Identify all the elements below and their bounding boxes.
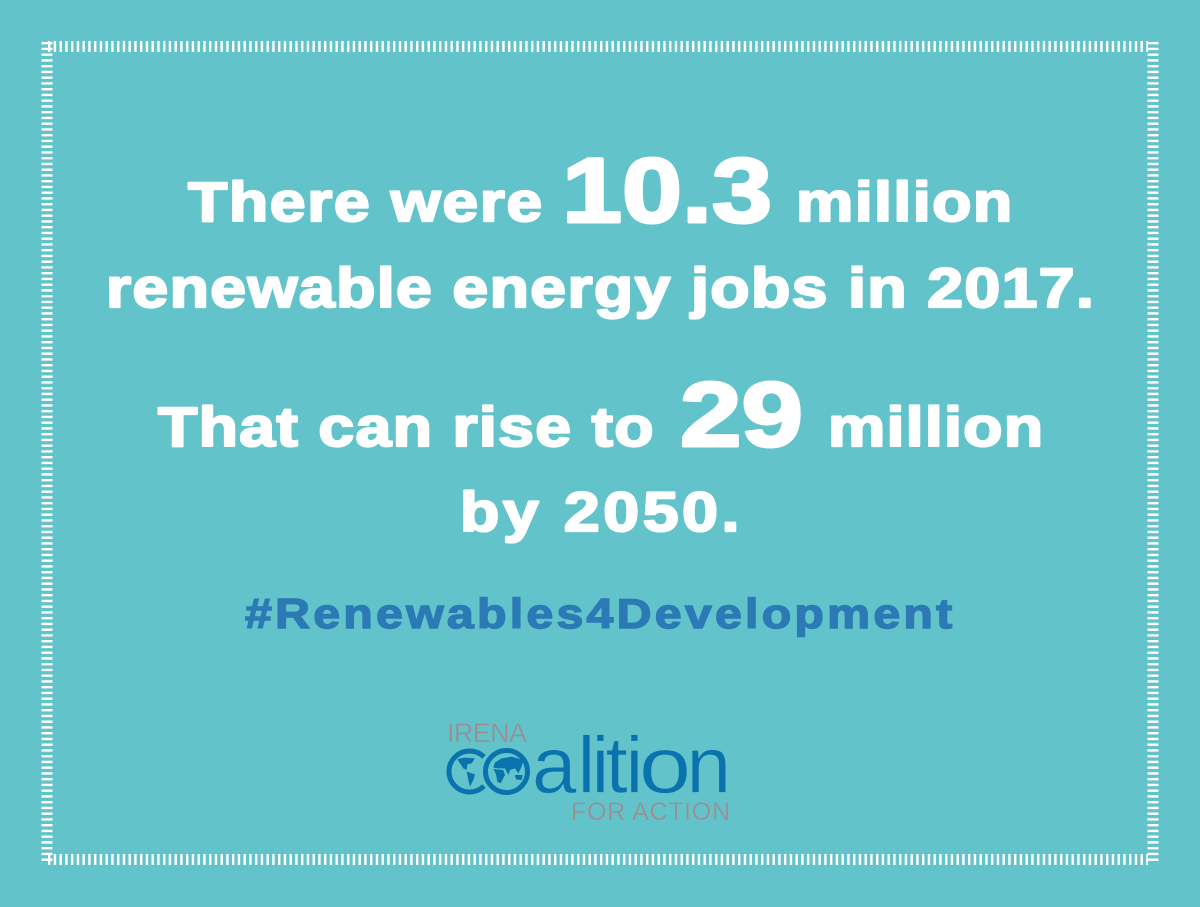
logo icon: globe letter o [486, 750, 528, 792]
headline: 10.3 million jobs: There were [188, 170, 542, 233]
logo wordmark [532, 720, 731, 810]
headline: 29 million by 2050: That can rise to [158, 395, 654, 458]
logo text: for action: FOR ACTION [571, 798, 730, 826]
headline: 10.3 million jobs: 10.3 [562, 140, 772, 242]
headline: 29 million by 2050 [158, 364, 1043, 543]
headline: 29 million by 2050: million [828, 395, 1043, 458]
logo: IRENA Coalition for Action [447, 718, 731, 826]
logo wordmark: o [639, 721, 691, 810]
headline: 29 million by 2050: by 2050. [460, 480, 739, 543]
headline: 10.3 million jobs [106, 140, 1094, 319]
headline: 10.3 million jobs: million [796, 170, 1012, 233]
logo wordmark: n [686, 720, 731, 810]
headline: 29 million by 2050: 29 [680, 364, 803, 466]
hashtag: #Renewables4Development [245, 590, 952, 637]
logo icon: globe letter c [449, 751, 484, 792]
logo text: IRENA: IRENA [447, 718, 527, 748]
logo wordmark: aliti [532, 720, 643, 810]
headline: 10.3 million jobs: renewable energy jobs in 2017. [106, 256, 1094, 319]
